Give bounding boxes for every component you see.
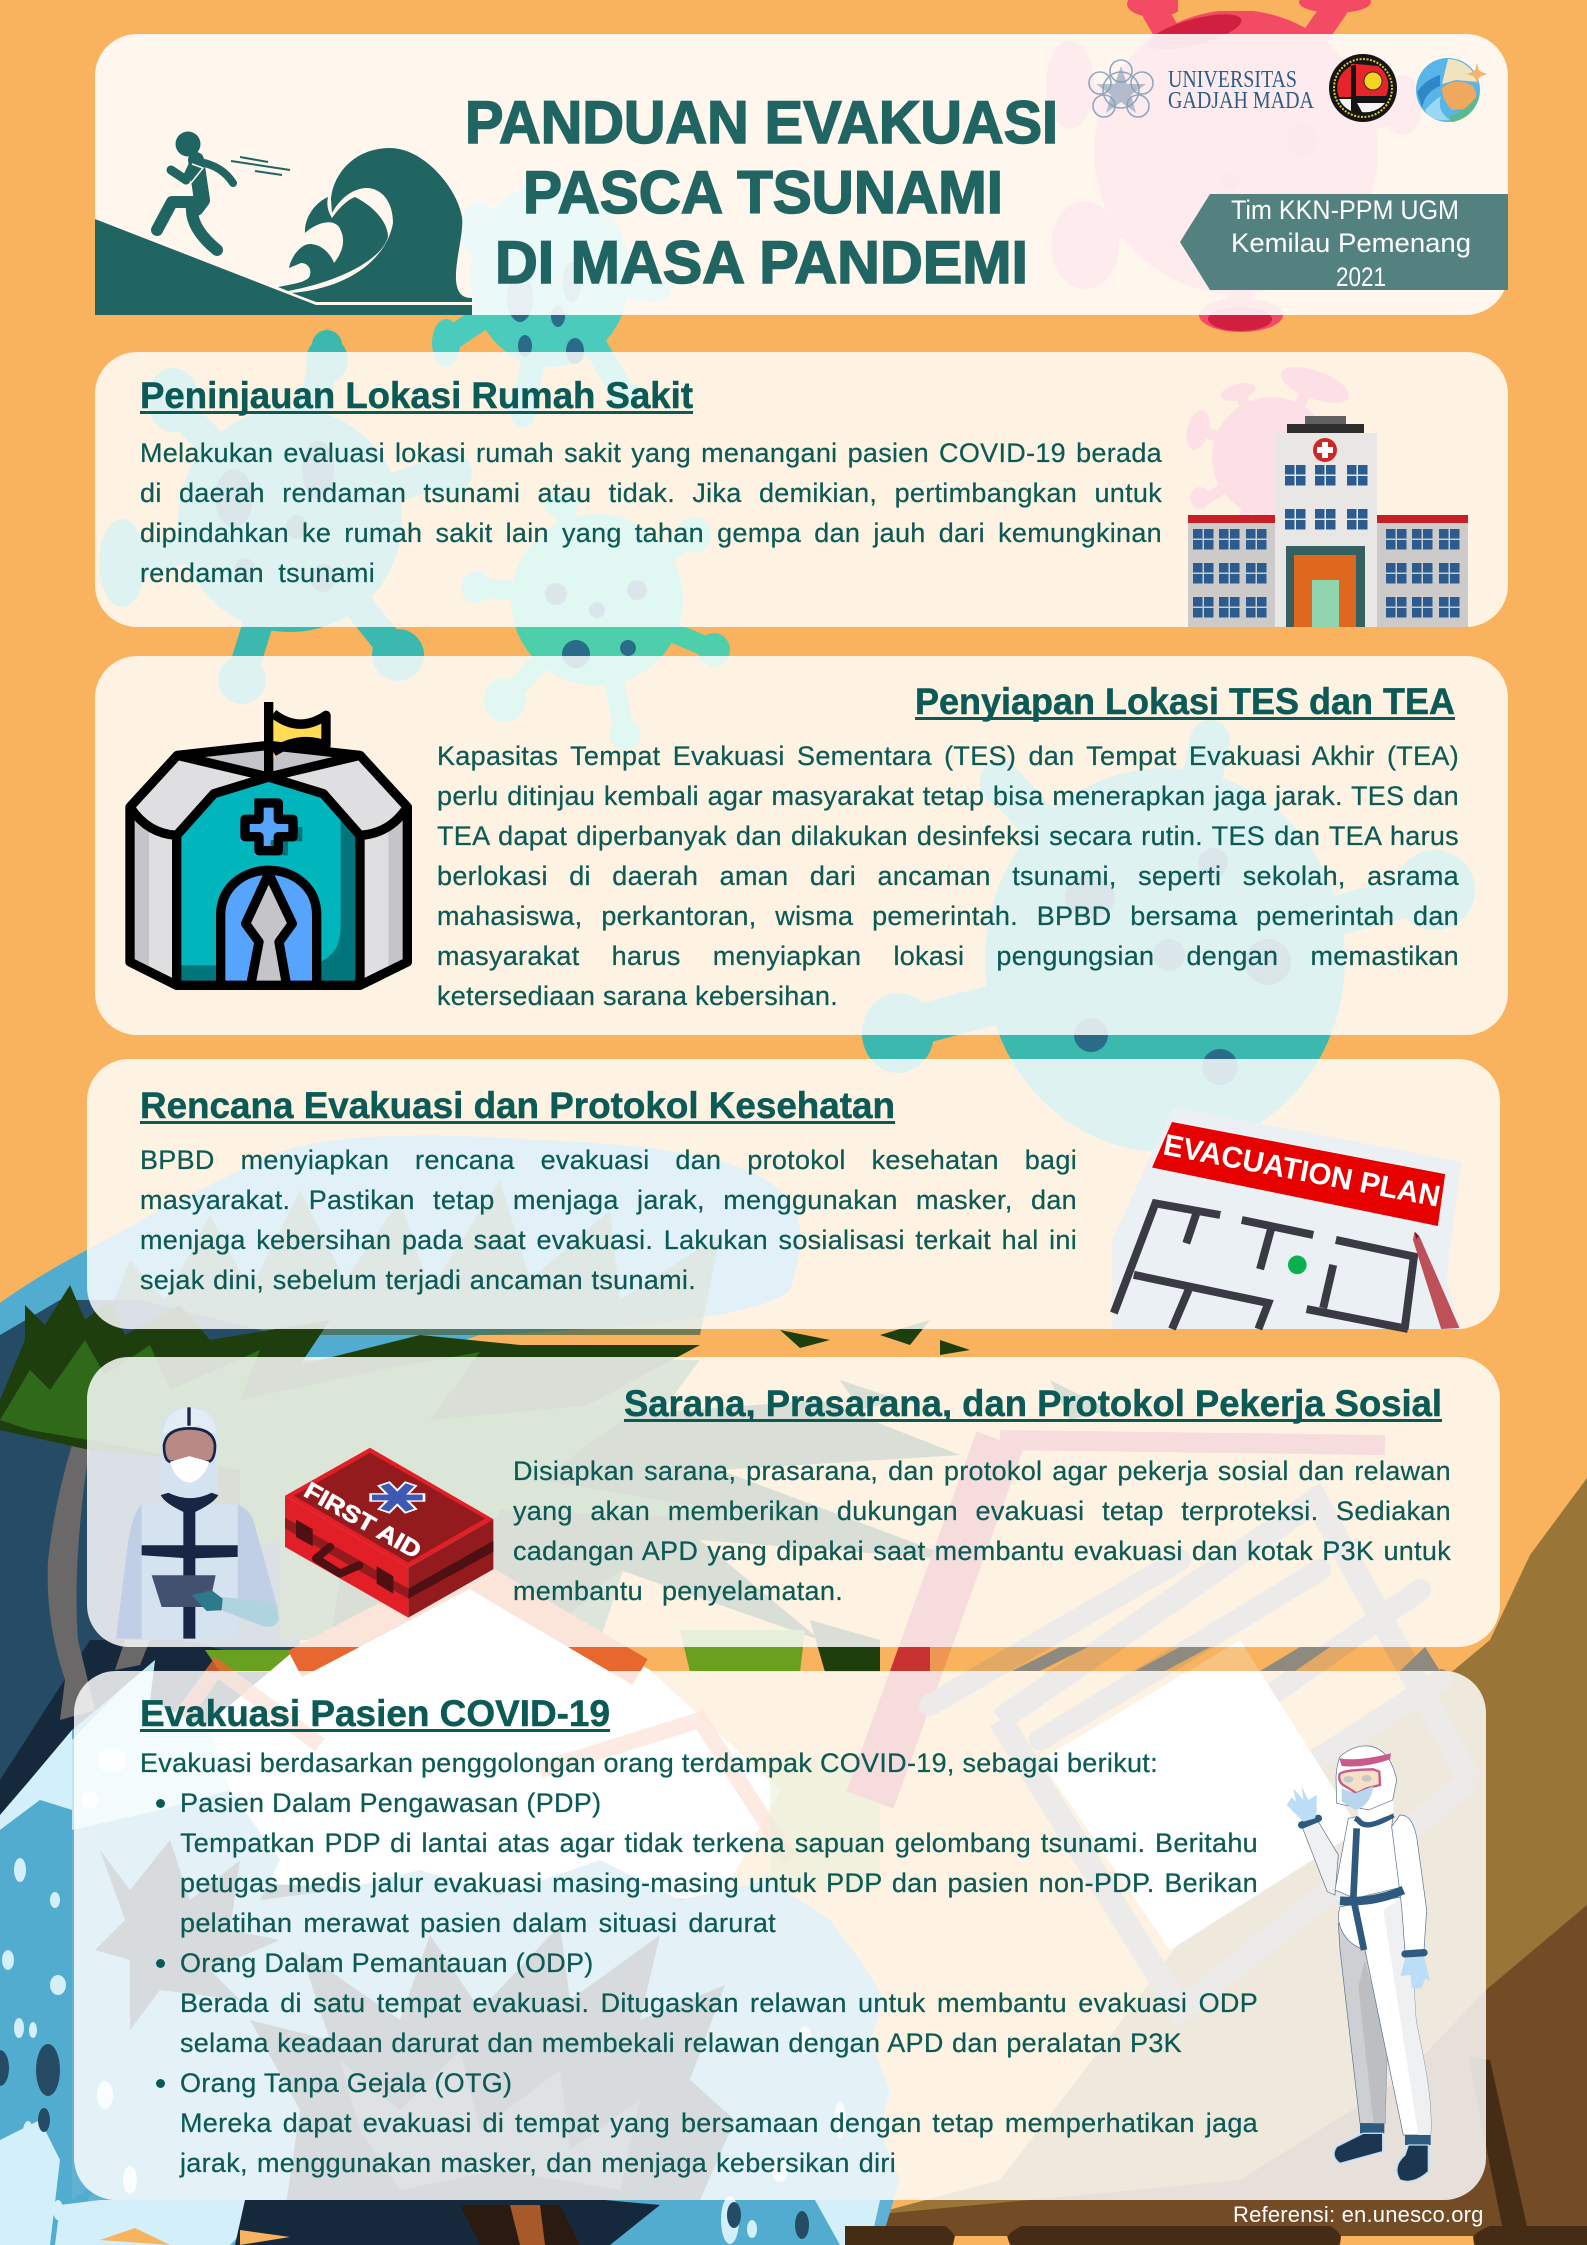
text block: menjaga kebersihan pada saat evakuasi. Lakukan sosialisasi terkait hal ini (140, 1225, 1077, 1255)
icon: evacuation plan (1110, 1107, 1461, 1333)
icon: person in protective suit (1286, 1746, 1432, 2182)
panel: penyiapan lokasi TES dan TEA (95, 656, 1508, 1035)
text block: Melakukan evaluasi lokasi rumah sakit yang menangani pasien COVID-19 berada (140, 438, 1162, 468)
virus: large teal right (862, 740, 1475, 1152)
text: reference: Referensi: en.unesco.org (1233, 2202, 1484, 2227)
text block: membantu penyelamatan. (513, 1576, 843, 1606)
text block (140, 1145, 1077, 1295)
scene: faint fronds behind rencana panel (100, 1180, 720, 1335)
text block (437, 741, 1459, 1011)
text block: petugas medis jalur evakuasi masing-masing untuk PDP dan pasien non-PDP. Berikan (180, 1868, 1258, 1898)
heading: Peninjauan Lokasi Rumah Sakit (140, 375, 693, 416)
heading: Evakuasi Pasien COVID-19 (140, 1693, 610, 1734)
heading: Rencana Evakuasi dan Protokol Kesehatan (140, 1085, 895, 1126)
text block: Disiapkan sarana, prasarana, dan protokol agar pekerja sosial dan relawan (513, 1456, 1451, 1486)
text block: TEA dapat diperbanyak dan dilakukan desinfeksi secara rutin. TES dan TEA harus (437, 821, 1459, 851)
title (465, 89, 1058, 296)
scene: dark gaps in the wave (95, 1840, 280, 2030)
icon: runner and tsunami wave (95, 132, 472, 315)
text block: masyarakat harus menyiapkan lokasi pengungsian dengan memastikan (437, 941, 1459, 971)
banner: team: 2021 (1336, 262, 1386, 292)
text block: Evakuasi berdasarkan penggolongan orang terdampak COVID-19, sebagai berikut: (140, 1748, 1158, 1778)
text block (140, 438, 1162, 588)
scene: tree trunk (48, 1445, 95, 1720)
text block: pelatihan merawat pasien dalam situasi darurat (180, 1908, 776, 1938)
icon: health worker and first aid kit (116, 1406, 494, 1639)
text block: Tempatkan PDP di lantai atas agar tidak terkena sapuan gelombang tsunami. Beritahu (180, 1828, 1258, 1858)
logo: Kemilau Pemenang (1416, 58, 1487, 122)
scene: lower greens (205, 1630, 805, 1672)
icon: hospital (1188, 416, 1468, 627)
text block: masyarakat. Pastikan tetap menjaga jarak, menggunakan masker, dan (140, 1185, 1077, 1215)
scene: sky arc (0, 1135, 801, 1400)
logo: Universitas Gadjah Mada: GADJAH MADA (1168, 88, 1315, 114)
text block: selama keadaan darurat dan membekali relawan dengan APD dan peralatan P3K (180, 2028, 1182, 2058)
icon: evacuation plan: EVACUATION PLAN (1161, 1129, 1443, 1214)
scene: window frame and planks (870, 1440, 1000, 1800)
text block: perlu ditinjau kembali agar masyarakat tetap bisa menerapkan jaga jarak. TES dan (437, 781, 1459, 811)
virus: red top right (1046, 0, 1422, 332)
scene: water droplets (2, 1858, 757, 2244)
text block: berlokasi di daerah aman dari ancaman tsunami, seperti sekolah, asrama (437, 861, 1459, 891)
title: DI MASA PANDEMI (495, 229, 1028, 296)
scene: navy ground (0, 1300, 880, 2245)
text block: jarak, menggunakan masker, dan menjaga kebersikan diri (180, 2148, 896, 2178)
scene: tsunami water (0, 1660, 900, 2245)
heading: Penyiapan Lokasi TES dan TEA (915, 681, 1455, 722)
text block: di daerah rendaman tsunami atau tidak. Jika demikian, pertimbangkan untuk (140, 478, 1162, 508)
icon: health worker and first aid kit: FIRST AID (300, 1477, 426, 1564)
text block: Berada di satu tempat evakuasi. Ditugaskan relawan untuk membantu evakuasi ODP (180, 1988, 1258, 2018)
panel: peninjauan lokasi rumah sakit (95, 352, 1508, 627)
virus: green teal centre (461, 493, 730, 750)
panel: header (95, 34, 1508, 315)
text block: sejak dini, sebelum terjadi ancaman tsunami. (140, 1265, 696, 1295)
scene: collapsed house (130, 1565, 780, 1900)
virus: large teal left (99, 337, 472, 704)
logo: KKN-PPM (1329, 54, 1397, 122)
text block: dipindahkan ke rumah sakit lain yang tahan gempa dan jauh dari kemungkinan (140, 518, 1162, 548)
panel: sarana prasarana (87, 1357, 1500, 1647)
scene: bottom ground bars (845, 2226, 1587, 2245)
banner: team (1180, 194, 1508, 292)
banner: team: Tim KKN-PPM UGM (1231, 195, 1459, 225)
text block: ketersediaan sarana kebersihan. (437, 981, 838, 1011)
icon: tent (125, 702, 412, 990)
text block: BPBD menyiapkan rencana evakuasi dan protokol kesehatan bagi (140, 1145, 1077, 1175)
text block: cadangan APD yang dipakai saat membantu evakuasi dan kotak P3K untuk (513, 1536, 1451, 1566)
title: PASCA TSUNAMI (523, 159, 1003, 226)
scene: leaf flecks (780, 1320, 1110, 1420)
logo: Universitas Gadjah Mada (1089, 60, 1315, 117)
text block: Pasien Dalam Pengawasan (PDP) (180, 1788, 601, 1818)
logo: Universitas Gadjah Mada: UNIVERSITAS (1168, 67, 1297, 93)
text block: Orang Dalam Pemantauan (ODP) (180, 1948, 594, 1978)
text block: Mereka dapat evakuasi di tempat yang bersamaan dengan tetap memperhatikan jaga (180, 2108, 1258, 2138)
virus: teal under header (432, 183, 671, 423)
text block (512, 1456, 1451, 1606)
text block (140, 1748, 1258, 2178)
text block: rendaman tsunami (140, 558, 375, 588)
virus: pink behind hospital (1182, 360, 1354, 525)
text block: mahasiswa, perkantoran, wisma pemerintah. BPBD bersama pemerintah dan (437, 901, 1459, 931)
scene: mountain (870, 1478, 1587, 2245)
title: PANDUAN EVAKUASI (465, 89, 1058, 156)
text block: Orang Tanpa Gejala (OTG) (180, 2068, 512, 2098)
heading: Sarana, Prasarana, dan Protokol Pekerja Sosial (624, 1383, 1442, 1424)
scene: palm fronds (280, 1360, 720, 1640)
text block: yang akan memberikan dukungan evakuasi tetap terproteksi. Sediakan (513, 1496, 1451, 1526)
banner: team: Kemilau Pemenang (1231, 228, 1471, 258)
panel: rencana evakuasi (87, 1059, 1500, 1329)
panel: evakuasi pasien COVID-19 (74, 1671, 1486, 2200)
text block: Kapasitas Tempat Evakuasi Sementara (TES) dan Tempat Evakuasi Akhir (TEA) (437, 741, 1459, 771)
